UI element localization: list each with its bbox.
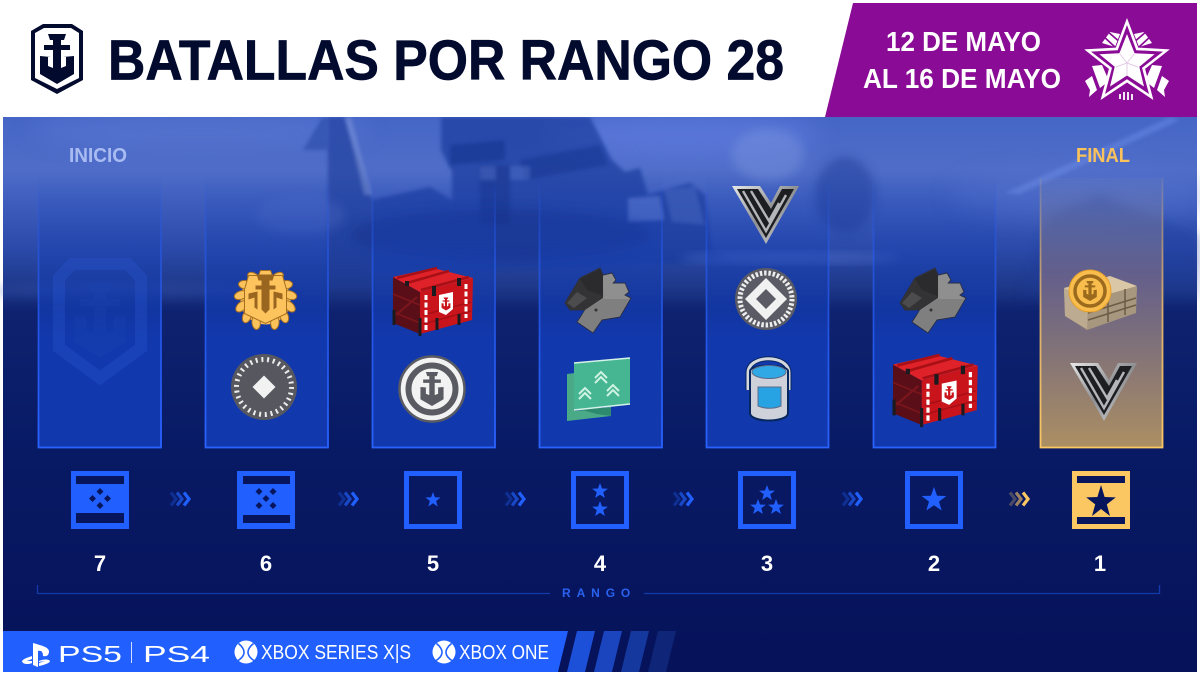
start label: INICIO (69, 145, 127, 167)
arrow 5 to 4 (506, 492, 524, 506)
platforms bar (3, 631, 676, 672)
panel: rank 3 rewards (706, 176, 829, 448)
rank 5 badge (406, 474, 460, 526)
icon: green signal flags (567, 358, 630, 421)
icon: V insignia (1070, 363, 1137, 421)
panel: rank 6 rewards (205, 176, 328, 448)
panel: rank 1 rewards (1040, 178, 1163, 448)
rank 4 number: 4 (594, 551, 607, 576)
rank 3 number: 3 (761, 551, 773, 576)
end label: FINAL (1076, 145, 1130, 167)
rank 6 badge (237, 471, 295, 529)
rank 7 number: 7 (94, 551, 106, 576)
arrow 2 to 1 (1010, 492, 1028, 506)
icon: wooden crate with coin (1064, 270, 1137, 330)
icon: red crate (393, 268, 473, 336)
PS5 label: PS5 (58, 641, 122, 667)
PS4 label: PS4 (143, 641, 210, 667)
background: warship scene (0, 110, 1200, 301)
panel: rank 4 rewards (539, 176, 662, 448)
icon: event star (1084, 18, 1170, 100)
divider (131, 642, 132, 663)
Xbox Series label: XBOX SERIES X|S (261, 642, 411, 664)
rank 2 number: 2 (928, 551, 940, 576)
date text: AL 16 DE MAYO (863, 63, 1061, 94)
panel: rank 2 rewards (873, 176, 996, 448)
rank 4 badge (574, 474, 626, 526)
icon: grey module (565, 268, 631, 333)
icon: gold laurel emblem (233, 270, 298, 330)
date text (863, 26, 1061, 94)
icon: grey module (900, 268, 966, 333)
rank 1 number: 1 (1094, 551, 1106, 576)
icon: Xbox (234, 640, 258, 664)
header background (0, 0, 1200, 117)
rank 1 badge (1072, 471, 1130, 529)
date text: 12 DE MAYO (886, 26, 1041, 57)
game logo (31, 24, 83, 94)
icon: V insignia (732, 186, 799, 244)
icon: paint bucket (748, 359, 789, 420)
rank track (71, 471, 1130, 576)
icon: red crate (893, 355, 978, 427)
icon: Xbox (432, 640, 456, 664)
date banner (825, 3, 1197, 117)
arrow 6 to 5 (339, 492, 357, 506)
icon: faded emblem (59, 264, 141, 378)
rank 5 number: 5 (427, 551, 439, 576)
decorative stripes (567, 631, 676, 672)
icon: laurel medal (735, 268, 797, 330)
icon: anchor coin (400, 356, 464, 422)
arrow 4 to 3 (674, 492, 692, 506)
axis label: RANGO (562, 586, 636, 600)
arrow 3 to 2 (843, 492, 861, 506)
icon: grey diamond medal (231, 354, 297, 420)
rank 6 number: 6 (260, 551, 272, 576)
icon: PlayStation (22, 643, 50, 667)
rank 3 badge (740, 474, 794, 526)
rank axis (38, 585, 1160, 600)
panel: rank 7 rewards (38, 176, 162, 448)
panel: rank 5 rewards (372, 176, 496, 448)
arrow 7 to 6 (171, 492, 189, 506)
title: BATALLAS POR RANGO 28 (108, 28, 784, 92)
Xbox One label: XBOX ONE (459, 642, 549, 664)
rank 7 badge (71, 471, 129, 529)
rank 2 badge (908, 474, 960, 526)
